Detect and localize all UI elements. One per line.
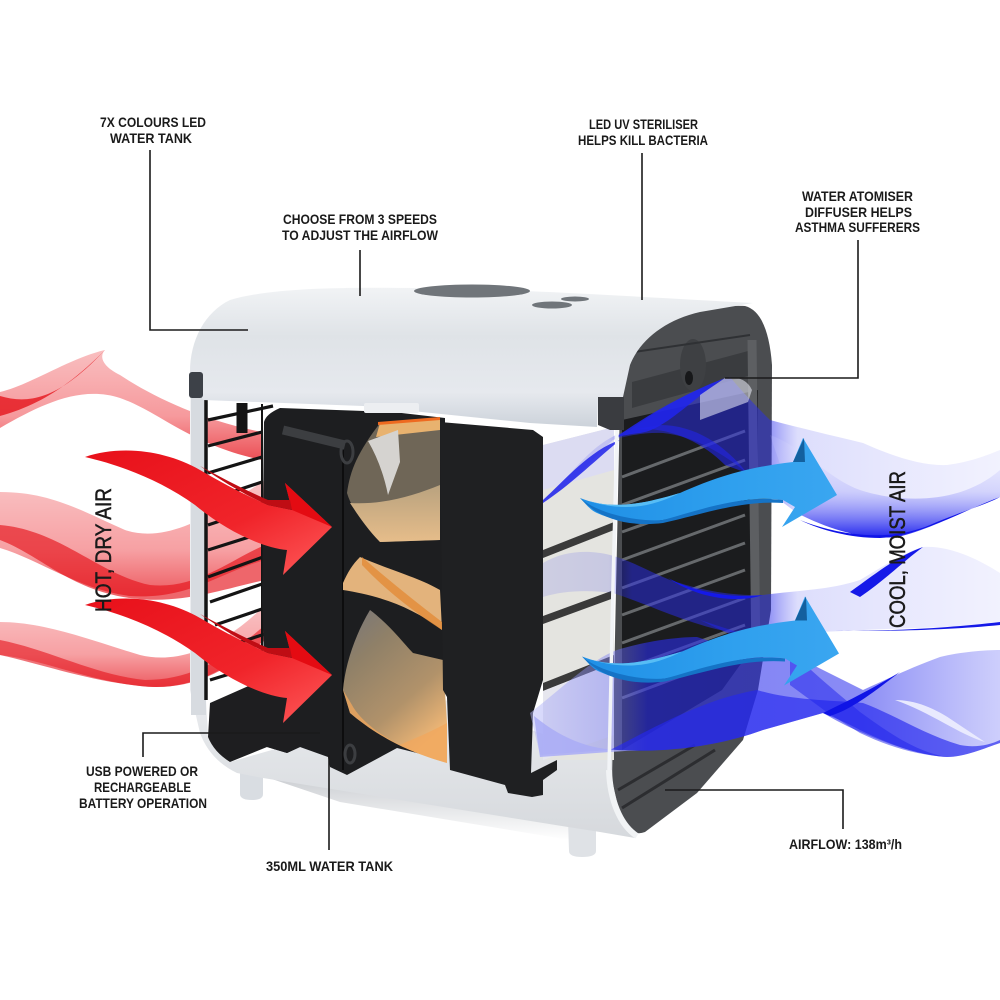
callout: atomiser: WATER ATOMISER xyxy=(802,188,913,204)
floor shadow xyxy=(263,776,570,840)
white base shell xyxy=(190,395,635,838)
blue ribbon bottom xyxy=(530,637,1000,757)
right foot xyxy=(568,820,596,857)
callout: USB power: RECHARGEABLE xyxy=(94,779,191,795)
callout: water tank: 350ML WATER TANK xyxy=(266,858,393,874)
fan blade middle xyxy=(343,557,442,630)
blue ribbon middle xyxy=(543,547,1000,668)
fan blade top xyxy=(347,417,440,542)
vent interior with slats xyxy=(622,340,758,750)
callout: UV steriliser: HELPS KILL BACTERIA xyxy=(578,132,708,148)
callout: LED water tank: 7X COLOURS LED xyxy=(100,114,206,130)
blue ribbon top xyxy=(543,377,1000,538)
callout: UV steriliser xyxy=(578,116,708,300)
fan blade bottom xyxy=(343,610,447,763)
left casing clip xyxy=(189,372,203,398)
label: hot dry air: HOT, DRY AIR xyxy=(91,488,116,612)
arrow: cool air lower xyxy=(582,596,839,686)
front pillar highlight xyxy=(609,430,617,770)
callout: atomiser: DIFFUSER HELPS xyxy=(805,204,912,220)
label: cool moist air: COOL, MOIST AIR xyxy=(885,471,910,628)
callout: USB power: USB POWERED OR xyxy=(86,763,198,779)
callout: atomiser xyxy=(725,188,920,378)
callout: airflow: AIRFLOW: 138m³/h xyxy=(789,836,902,852)
frame upper panel with hub xyxy=(632,335,752,408)
fan frame highlights xyxy=(283,430,355,770)
top casing xyxy=(190,288,753,427)
callout: LED water tank xyxy=(100,114,248,330)
left bottom tank interior xyxy=(208,680,300,762)
callout: speeds: TO ADJUST THE AIRFLOW xyxy=(282,227,439,243)
right dark frame xyxy=(612,306,772,833)
right bottom white edge xyxy=(609,770,637,836)
vent lower louvres xyxy=(618,745,715,808)
arrow: cool air upper xyxy=(580,438,837,527)
arrow: hot air lower xyxy=(85,599,332,723)
left grille xyxy=(206,398,273,700)
top controls xyxy=(414,284,589,308)
callout: USB power xyxy=(79,733,320,811)
callout: speeds: CHOOSE FROM 3 SPEEDS xyxy=(283,211,437,227)
red air ribbons behind the unit xyxy=(0,350,265,687)
callout: water tank xyxy=(266,755,393,874)
callout: atomiser: ASTHMA SUFFERERS xyxy=(795,219,920,235)
filter stack xyxy=(543,427,614,760)
callout: LED water tank: WATER TANK xyxy=(110,130,192,146)
callout: airflow xyxy=(665,790,902,852)
filter housing xyxy=(440,422,557,797)
callout: speeds xyxy=(282,211,439,296)
callout: UV steriliser: LED UV STERILISER xyxy=(589,116,698,132)
casing tab xyxy=(364,403,419,413)
arrow: hot air upper xyxy=(85,451,332,575)
callout: USB power: BATTERY OPERATION xyxy=(79,795,207,811)
left pillar xyxy=(191,395,206,715)
right casing clip xyxy=(598,397,624,430)
fan housing xyxy=(262,408,445,775)
left foot xyxy=(240,770,263,800)
